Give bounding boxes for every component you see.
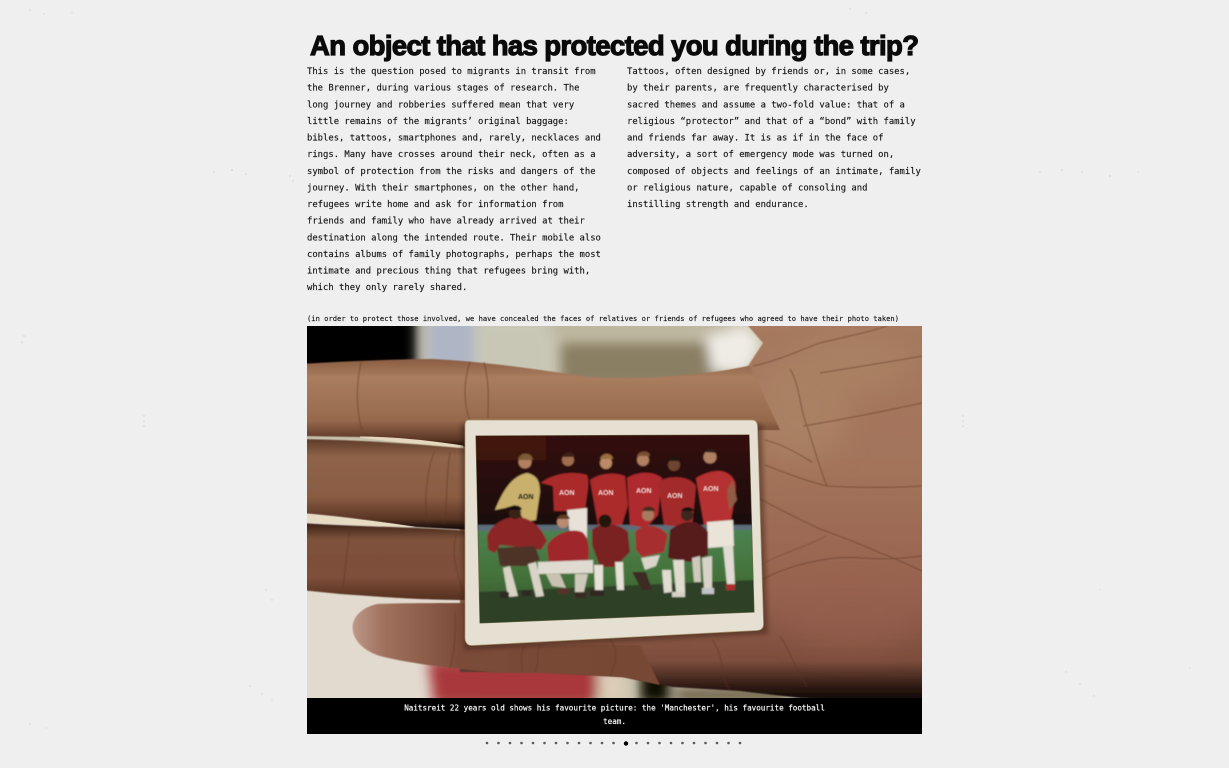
text block: left column: little remains of the migrants’ original baggage: bbox=[307, 117, 569, 127]
second finger bbox=[300, 439, 470, 530]
text block: left column: journey. With their smartphones, on the other hand, bbox=[307, 183, 580, 193]
text block: right column: instilling strength and endurance. bbox=[627, 200, 809, 210]
text block: right column bbox=[627, 67, 921, 210]
sponsor marks on shirts: AON bbox=[598, 490, 614, 497]
text block: left column: intimate and precious thing that refugees bring with, bbox=[307, 267, 590, 277]
top finger bbox=[300, 359, 780, 447]
text block: left column: destination along the intended route. Their mobile also bbox=[307, 233, 601, 243]
text block: right column: adversity, a sort of emergency mode was turned on, bbox=[627, 150, 894, 160]
goalkeeper bbox=[495, 473, 540, 522]
text block: left column: rings. Many have crosses around their neck, often as a bbox=[307, 150, 596, 160]
light sliver below top finger bbox=[360, 437, 463, 448]
football card bbox=[465, 420, 764, 646]
sponsor marks on shirts: AON bbox=[667, 493, 683, 500]
text block: right column: religious “protector” and that of a “bond” with family bbox=[627, 117, 916, 127]
title: An object that has protected you during the trip? bbox=[310, 30, 919, 61]
text block: left column: refugees write home and ask for information from bbox=[307, 200, 563, 210]
text block: right column: by their parents, are frequently characterised by bbox=[627, 84, 889, 94]
light sliver below second finger bbox=[307, 514, 416, 527]
standing players bbox=[541, 473, 588, 511]
text block: left column: long journey and robberies suffered mean that very bbox=[307, 100, 574, 110]
text block: left column: This is the question posed to migrants in transit from bbox=[307, 67, 596, 77]
text block: left column: symbol of protection from the risks and dangers of the bbox=[307, 167, 596, 177]
text block: right column: or religious nature, capable of consoling and bbox=[627, 183, 867, 193]
front row bbox=[487, 517, 547, 553]
skin creases bbox=[342, 326, 922, 690]
shadow around card bbox=[461, 424, 768, 650]
text block: right column: sacred themes and assume a two-fold value: that of a bbox=[627, 100, 905, 110]
text block: left column: the Brenner, during various stages of research. The bbox=[307, 84, 580, 94]
third finger bbox=[300, 523, 470, 600]
pagination dots bbox=[486, 741, 741, 746]
team picture bbox=[470, 430, 760, 625]
caption bar: Naitsreit 22 years old shows his favourite picture: the 'Manchester', his favourite football bbox=[404, 704, 825, 712]
text block: right column: and friends far away. It is as if in the face of bbox=[627, 134, 883, 144]
text block: left column: friends and family who have already arrived at their bbox=[307, 217, 585, 227]
text block: left column: bibles, tattoos, smartphones and, rarely, necklaces and bbox=[307, 134, 601, 144]
photo: hand holding football team picture bbox=[307, 326, 922, 698]
text block: left column bbox=[307, 67, 601, 293]
text block: left column: which they only rarely shared. bbox=[307, 283, 467, 293]
text block: left column: contains albums of family photographs, perhaps the most bbox=[307, 250, 601, 260]
caption bar: team. bbox=[603, 717, 626, 726]
palm bbox=[460, 320, 940, 705]
photo background bbox=[307, 326, 808, 698]
photo note: (in order to protect those involved, we have concealed the faces of relatives or friends of refugees who agreed to have their photo taken) bbox=[307, 314, 899, 323]
bottom finger bbox=[353, 603, 660, 685]
sponsor marks on shirts: AON bbox=[636, 488, 652, 495]
sponsor marks on shirts: AON bbox=[559, 490, 575, 497]
text block: right column: composed of objects and feelings of an intimate, family bbox=[627, 167, 921, 177]
sponsor marks on shirts: AON bbox=[703, 486, 719, 493]
sponsor marks on shirts bbox=[518, 486, 719, 501]
sponsor marks on shirts: AON bbox=[518, 494, 534, 501]
caption bar bbox=[307, 698, 922, 734]
text block: right column: Tattoos, often designed by friends or, in some cases, bbox=[627, 67, 910, 77]
